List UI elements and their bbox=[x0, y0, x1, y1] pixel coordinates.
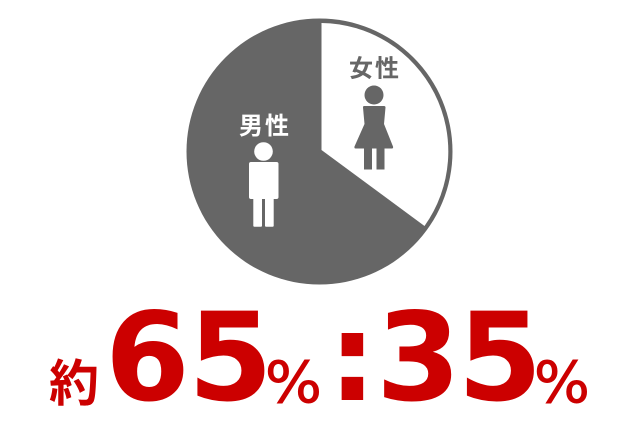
value: 65 bbox=[105, 287, 273, 424]
icon: female figure bbox=[354, 86, 393, 170]
value: 35 bbox=[376, 287, 542, 424]
icon: male figure bbox=[249, 142, 278, 227]
female slice bbox=[322, 23, 448, 226]
label: female: 女性 bbox=[349, 48, 399, 84]
unit: percent: % bbox=[534, 349, 590, 416]
unit: percent: % bbox=[265, 349, 322, 416]
label: male: 男性 bbox=[239, 106, 289, 141]
headline: about 65% to 35% bbox=[49, 287, 590, 424]
prefix: 約 bbox=[49, 344, 99, 416]
pie chart: male 65% / female 35% bbox=[186, 18, 452, 284]
